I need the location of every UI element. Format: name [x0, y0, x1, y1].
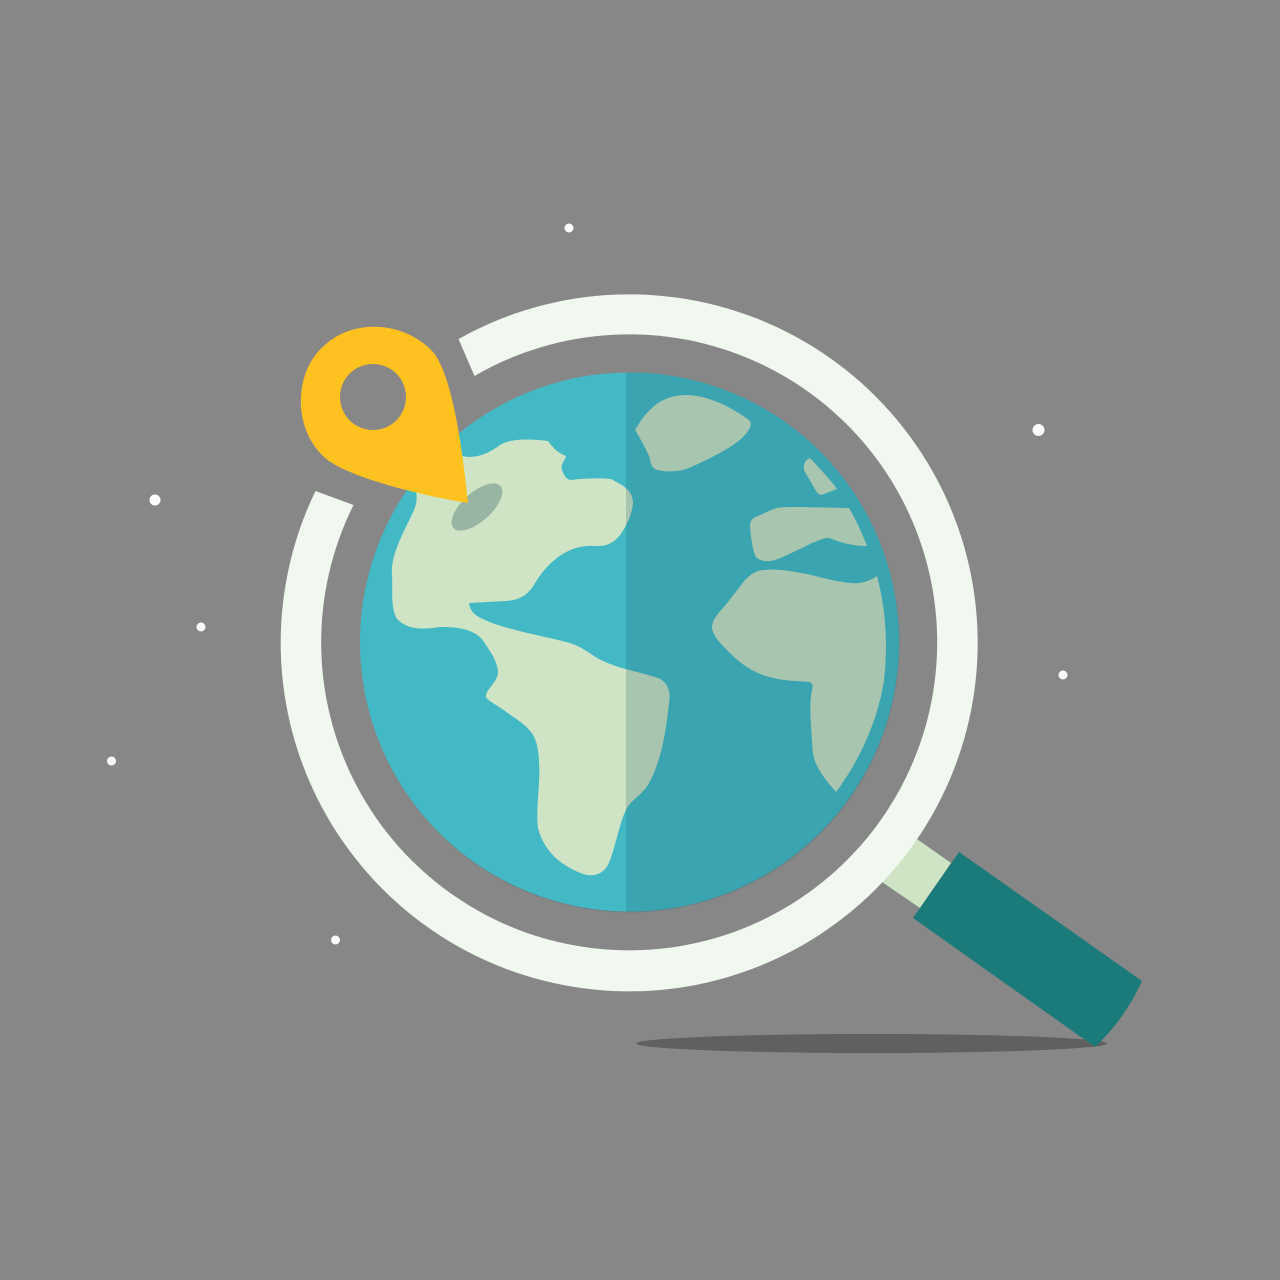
illustration: globe under magnifying glass: [107, 224, 1142, 1053]
handle neck: [882, 839, 951, 908]
ground shadow: [636, 1034, 1107, 1053]
handle grip: [913, 852, 1142, 1047]
magnifying glass ring: [281, 294, 978, 991]
continent: Greenland: [635, 395, 751, 471]
continent: small island: [804, 458, 837, 495]
icon: location pin: [301, 327, 468, 503]
globe night-side shading: [626, 372, 899, 912]
continent: the Americas: [392, 440, 670, 875]
globe edge shadow: [360, 374, 900, 912]
globe ocean: [360, 372, 899, 912]
magnifying glass handle: [882, 839, 1142, 1047]
decorative star dots: [107, 224, 1068, 944]
lake: [452, 483, 502, 531]
continent: Africa: [712, 570, 886, 792]
globe: [360, 360, 916, 930]
continent: Europe: [750, 507, 867, 561]
